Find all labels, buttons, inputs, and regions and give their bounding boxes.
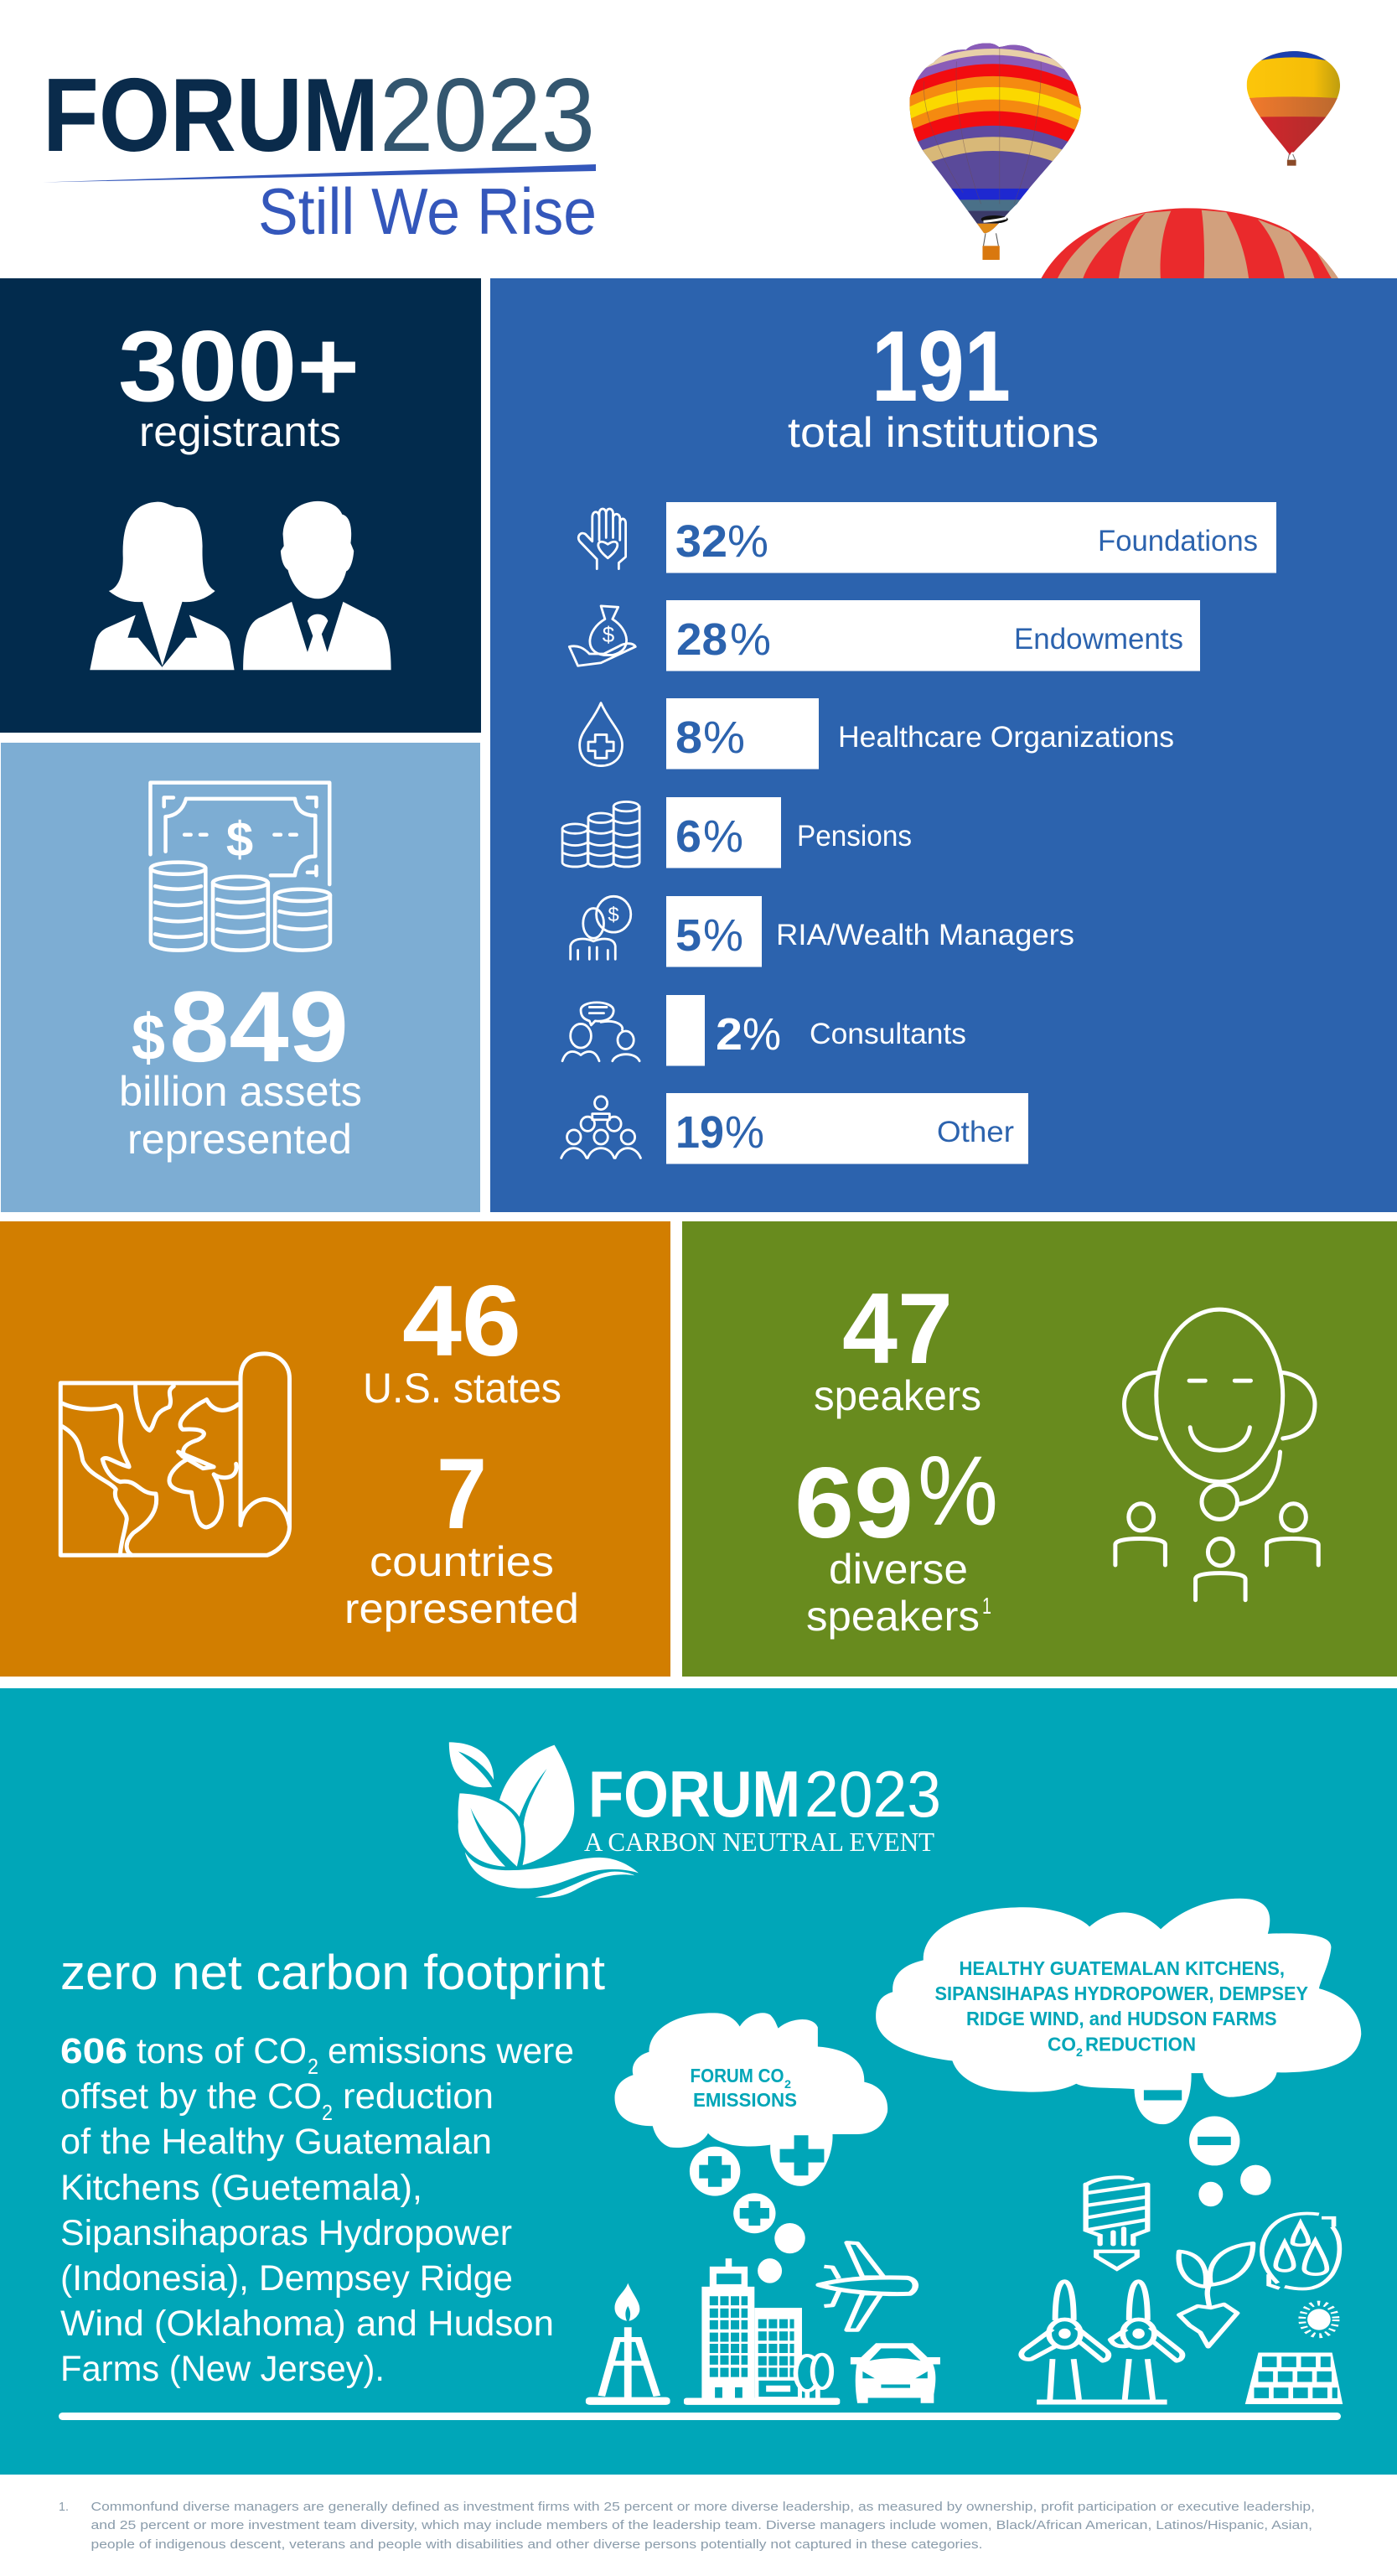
stat: 46 U.S. states: U.S. states — [363, 1365, 561, 1412]
cloud label: Forum CO2 emissions: EMISSIONS — [693, 2089, 797, 2111]
row: Pensions 6%: 6 — [675, 811, 701, 862]
icon: office buildings — [684, 2258, 840, 2405]
cloud: CO2 reduction — [876, 1899, 1361, 2124]
row: Pensions 6%: Pensions — [797, 820, 912, 853]
text block: emissions offset description: Farms (New Jersey). — [60, 2349, 385, 2389]
row: RIA/Wealth Managers 5%: RIA/Wealth Managers — [776, 919, 1074, 951]
row: Other 19% — [561, 1093, 1028, 1164]
row: RIA/Wealth Managers 5%: 5 — [675, 910, 701, 961]
footnote: Commonfund diverse managers are generally defined as investment firms with 25 percent or more diverse leadership, as measured by ownership, profit participation or executive leadership, — [91, 2500, 1315, 2514]
illustration: emissions sources — [586, 2013, 940, 2405]
text block: emissions offset description: Wind (Oklahoma) and Hudson — [60, 2304, 554, 2344]
icon: water droplets with cycle arrows — [1262, 2213, 1339, 2289]
panel: registrants — [0, 278, 481, 733]
title: FORUM2023 — [43, 58, 595, 174]
icon: car — [851, 2343, 940, 2403]
text block: emissions offset description: offset by the CO — [60, 2076, 322, 2117]
footnote: people of indigenous descent, veterans and people with disabilities and other diverse persons potentially not captured in these categories. — [91, 2537, 982, 2552]
label: billion assets represented — [119, 1068, 362, 1163]
row: Other 19%: Other — [937, 1116, 1014, 1148]
stat: 7 countries represented: countries — [370, 1538, 554, 1585]
icon: airplane — [819, 2242, 915, 2330]
panel: carbon neutral — [0, 1688, 1397, 2475]
title: FORUM2023: FORUM — [43, 58, 379, 174]
stat: 69% diverse speakers: 1 — [982, 1593, 991, 1619]
cloud label: Forum CO2 emissions — [691, 2065, 797, 2111]
text block: emissions offset description: 606 — [60, 2031, 127, 2071]
logo: Forum 2023 a carbon neutral event: FORUM — [588, 1757, 800, 1831]
row: Other 19%: 19 — [675, 1107, 724, 1158]
icon: woman and man silhouettes — [90, 501, 391, 670]
icon: wind turbines — [1022, 2282, 1182, 2402]
row: RIA/Wealth Managers 5% — [571, 896, 1074, 967]
row: Healthcare Organizations 8%: % — [703, 713, 745, 763]
stat: 47 speakers — [814, 1272, 981, 1419]
stat: 47 speakers: speakers — [814, 1372, 981, 1419]
text block: emissions offset description: (Indonesia), Dempsey Ridge — [60, 2258, 513, 2299]
stat: 7 countries represented: represented — [344, 1585, 579, 1632]
ground line — [59, 2413, 1341, 2420]
cloud label: CO2 reduction projects: REDUCTION — [1085, 2034, 1196, 2055]
cloud label: Forum CO2 emissions: FORUM CO — [691, 2065, 784, 2086]
row: RIA/Wealth Managers 5%: % — [703, 910, 743, 961]
balloon: small yellow — [1244, 48, 1343, 166]
icon: gas flare tower — [586, 2283, 670, 2405]
logo: Forum 2023 a carbon neutral event: 2023 — [805, 1757, 941, 1831]
cloud label: CO2 reduction projects: 2 — [1076, 2045, 1083, 2059]
stat: 46 U.S. states: 46 — [402, 1265, 521, 1377]
illustration: carbon reduction projects — [876, 1899, 1361, 2404]
cloud: Forum CO2 emissions — [615, 2013, 887, 2186]
row: Other 19%: % — [725, 1107, 764, 1158]
label: total institutions: total institutions — [788, 409, 1099, 456]
panel: assets — [1, 743, 480, 1212]
row: Endowments 28%: 28 — [676, 614, 727, 665]
icon: plant seedling — [1179, 2243, 1253, 2346]
stat: 46 U.S. states — [363, 1265, 561, 1412]
logo: Forum 2023 a carbon neutral event — [449, 1742, 941, 1898]
row: Healthcare Organizations 8%: Healthcare Organizations — [838, 721, 1174, 754]
logo: Forum 2023 a carbon neutral event: A CARBON NEUTRAL EVENT — [584, 1827, 934, 1857]
cloud label: CO2 reduction projects: HEALTHY GUATEMALAN KITCHENS, — [959, 1957, 1285, 1979]
title: FORUM2023: 2023 — [380, 58, 595, 174]
text block: emissions offset description: Sipansihaporas Hydropower — [60, 2213, 512, 2253]
row: Endowments 28% — [569, 600, 1200, 671]
icon: banknote and coins — [150, 783, 330, 951]
bubbles with minus signs — [1144, 2090, 1271, 2206]
row: Healthcare Organizations 8% — [580, 698, 1174, 770]
text block: emissions offset description — [60, 2031, 574, 2389]
row: Pensions 6% — [562, 797, 912, 868]
label: registrants: registrants — [139, 408, 341, 455]
balloon: large red and tan dome — [1037, 207, 1343, 279]
row: Consultants 2% — [562, 995, 966, 1066]
text block: emissions offset description: 2 — [322, 2100, 333, 2125]
stat: 300+: 300+ — [118, 310, 360, 422]
stat: 69% diverse speakers: 69 — [794, 1447, 913, 1559]
row: Healthcare Organizations 8%: 8 — [675, 713, 702, 763]
cloud label: CO2 reduction projects: RIDGE WIND, and HUDSON FARMS — [966, 2008, 1277, 2029]
row: Foundations 32%: % — [727, 516, 768, 567]
label: billion assets represented: billion assets — [119, 1068, 362, 1115]
stat: 69% diverse speakers — [794, 1436, 998, 1640]
cloud label: CO2 reduction projects: SIPANSIHAPAS HYDROPOWER, DEMPSEY — [935, 1983, 1308, 2004]
row: Endowments 28%: $ — [603, 622, 615, 647]
panel: geography — [0, 1221, 670, 1677]
heading: zero net carbon footprint: zero net carbon footprint — [60, 1946, 605, 2000]
balloon: large multicolour — [910, 44, 1081, 260]
row: RIA/Wealth Managers 5%: $ — [608, 904, 619, 926]
stat: 69% diverse speakers: % — [918, 1436, 998, 1547]
panel: institutions — [490, 278, 1397, 1212]
stat: 69% diverse speakers: speakers — [806, 1593, 980, 1640]
text block: emissions offset description: reduction — [343, 2076, 494, 2117]
row: Consultants 2%: 2 — [716, 1009, 742, 1060]
icon: world map scroll — [60, 1354, 289, 1555]
text block: emissions offset description: Kitchens (Guetemala), — [60, 2168, 422, 2208]
icon: solar panel — [1245, 2353, 1343, 2404]
tagline: Still We Rise: Still We Rise — [258, 174, 597, 248]
row: Endowments 28%: Endowments — [1014, 623, 1183, 656]
stat: $849: 849 — [169, 971, 349, 1083]
row: Foundations 32%: Foundations — [1098, 525, 1258, 557]
text block: emissions offset description: emissions were — [328, 2031, 574, 2071]
icon: energy saving bulb — [1086, 2177, 1147, 2269]
balloons illustration — [900, 39, 1343, 279]
footnote — [59, 2500, 1315, 2552]
icon: banknote and coins: $ — [226, 812, 253, 867]
row: Pensions 6%: % — [703, 811, 743, 862]
stat: $849: $ — [132, 1000, 165, 1074]
row: Consultants 2%: % — [742, 1009, 781, 1060]
row: Foundations 32% — [578, 502, 1276, 573]
label: billion assets represented: represented — [127, 1116, 352, 1163]
footnote: and 25 percent or more investment team diversity, which may include members of the leadership team. Diverse managers include women, Black/African American, Latinos/Hispanic, Asian, — [91, 2518, 1312, 2532]
panel: speakers — [682, 1221, 1397, 1677]
cloud label: CO2 reduction projects: CO — [1048, 2034, 1076, 2055]
text block: emissions offset description: of the Healthy Guatemalan — [60, 2122, 492, 2162]
row: Consultants 2%: Consultants — [810, 1018, 966, 1050]
stat: 7 countries represented: 7 — [437, 1438, 487, 1550]
logo: Forum 2023 Still We Rise — [43, 58, 597, 248]
icon: speaker with headset and audience — [1115, 1309, 1318, 1600]
row: Foundations 32%: 32 — [675, 516, 727, 567]
footnote: 1. — [59, 2500, 69, 2514]
bubbles with plus signs — [690, 2135, 824, 2283]
cloud label: CO2 reduction projects — [935, 1957, 1308, 2059]
cloud label: Forum CO2 emissions: 2 — [784, 2077, 791, 2091]
icon: sun — [1302, 2304, 1336, 2335]
text block: emissions offset description: tons of CO — [137, 2031, 307, 2071]
text block: emissions offset description: 2 — [308, 2054, 318, 2079]
stat: 69% diverse speakers: diverse — [829, 1546, 968, 1593]
row: Endowments 28%: % — [730, 614, 771, 665]
stat: 7 countries represented — [344, 1438, 579, 1632]
stat: 191: 191 — [872, 310, 1011, 422]
stat: 47 speakers: 47 — [842, 1272, 953, 1385]
